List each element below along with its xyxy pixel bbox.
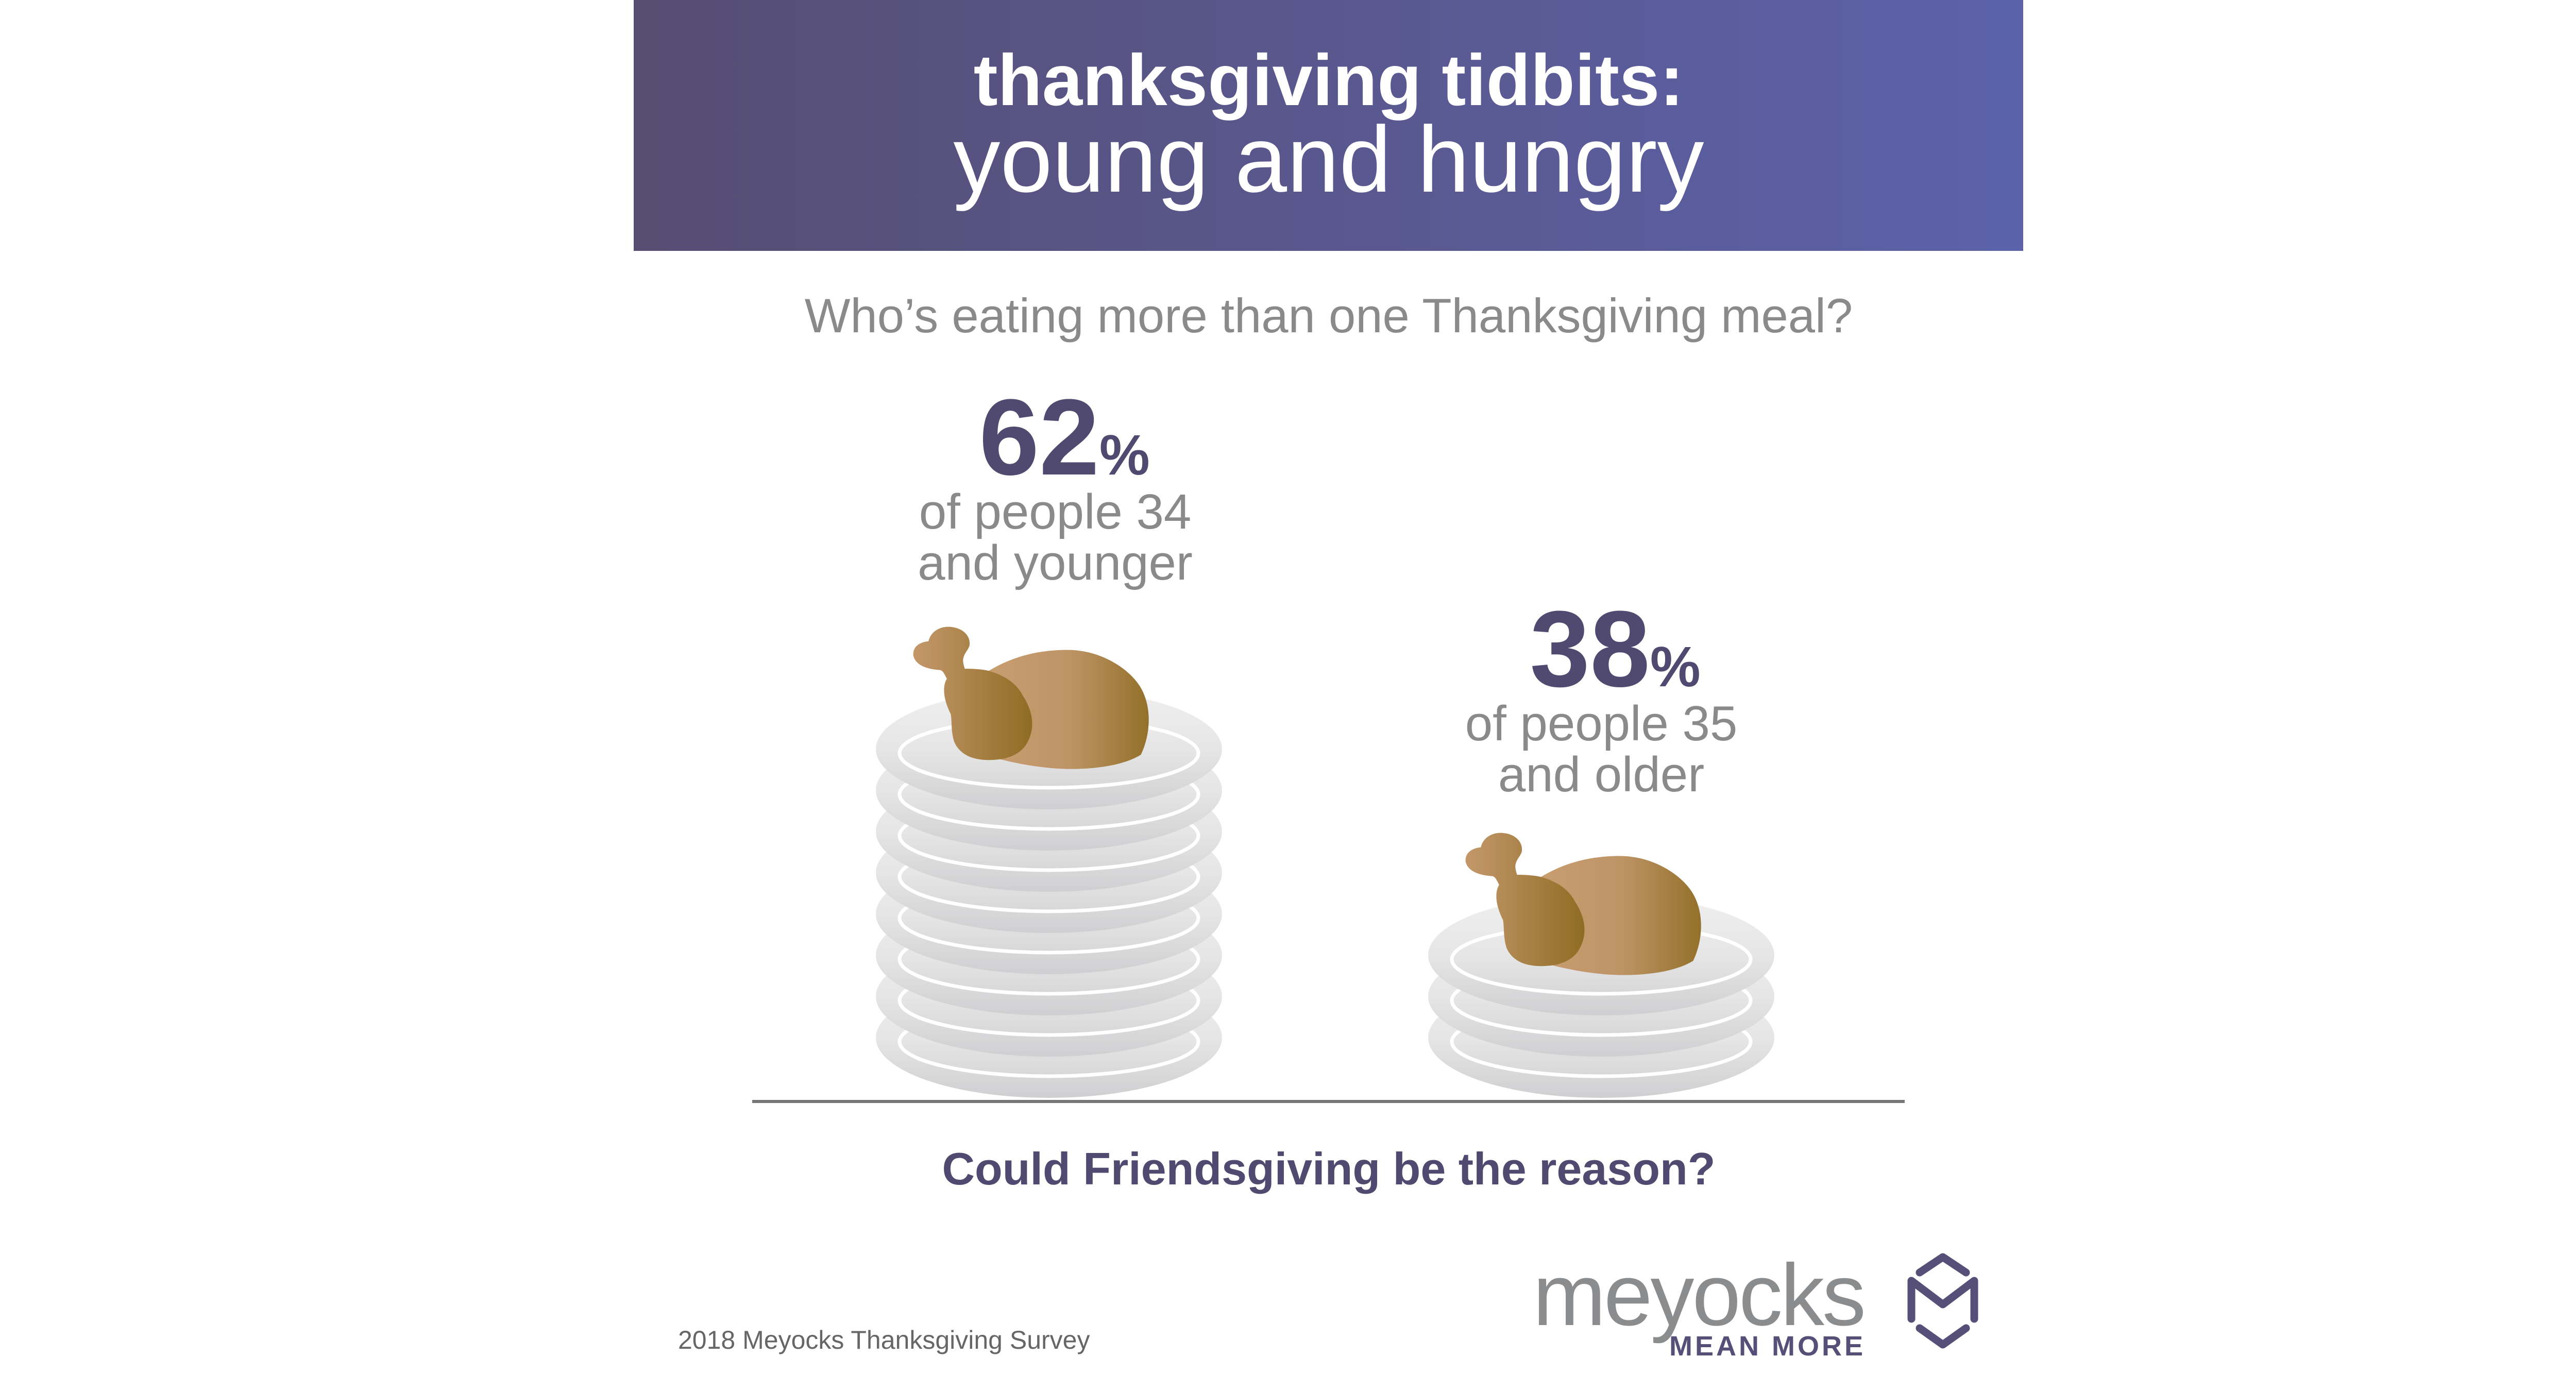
question: Who’s eating more than one Thanksgiving meal?	[805, 289, 1853, 343]
logo: MEAN MORE	[1669, 1331, 1866, 1362]
title line 2: young and hungry	[953, 107, 1704, 212]
stat: 38%: and older	[1498, 747, 1704, 802]
stat: 62%	[918, 377, 1193, 590]
stat: 62%: of people 34	[919, 484, 1191, 539]
icon: logo mark	[1911, 1257, 1974, 1345]
plate stack right	[1428, 895, 1774, 1098]
header banner	[634, 0, 2023, 251]
plate stack left	[876, 689, 1222, 1098]
logo	[1533, 1246, 1974, 1362]
logo: meyocks	[1533, 1246, 1864, 1344]
icon: turkey right	[1466, 833, 1701, 975]
stat: 38%: 38%	[1530, 588, 1701, 709]
footer source: 2018 Meyocks Thanksgiving Survey	[678, 1326, 1090, 1354]
stat: 38%	[1465, 588, 1737, 802]
stat: 62%: 62%	[979, 377, 1150, 498]
icon: turkey left	[913, 627, 1149, 769]
stat: 38%: of people 35	[1465, 696, 1737, 751]
stat: 62%: and younger	[918, 535, 1193, 590]
closing question: Could Friendsgiving be the reason?	[942, 1143, 1716, 1194]
title line 1: thanksgiving tidbits:	[974, 39, 1684, 121]
